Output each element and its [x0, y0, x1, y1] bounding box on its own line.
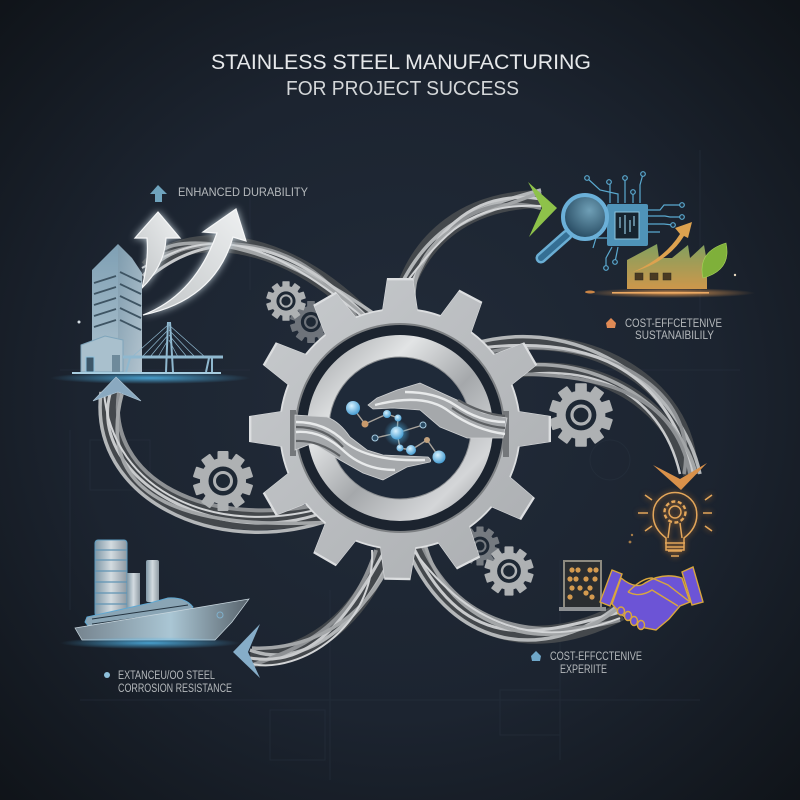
bullet: [104, 672, 110, 678]
label: corrosion: EXTANCEU/OO STEEL: [118, 670, 215, 682]
label: sustainability: SUSTANAIBILILY: [635, 330, 714, 342]
cable: right: [480, 337, 700, 474]
central gear: [249, 278, 551, 580]
small gears: [193, 281, 613, 596]
title: FOR PROJECT SUCCESS: [286, 78, 519, 100]
panel: sustainability: [528, 172, 755, 342]
icon: ship: [75, 598, 249, 640]
icon: abacus: [559, 561, 606, 611]
cable: top left: [142, 243, 380, 330]
panel: expertise: [531, 463, 712, 676]
panel: corrosion resistance: [60, 540, 260, 695]
gear inner ring: [296, 324, 504, 532]
icon: bridge: [123, 322, 223, 372]
hand sockets: [290, 410, 509, 457]
icon: leaf: [702, 243, 727, 278]
ground glow: [585, 288, 755, 298]
cable: bottom left: [250, 550, 396, 666]
icon: tower: [81, 244, 142, 372]
label: expertise: EXPERIITE: [560, 664, 607, 676]
icon: house: [531, 651, 541, 661]
icon: smokestacks: [95, 540, 159, 616]
arrow: white left: [135, 212, 180, 288]
label: sustainability: [625, 318, 722, 342]
lower hand: [295, 415, 431, 480]
cable: bottom right: [404, 540, 620, 640]
icon: handshake: [600, 567, 703, 630]
label: corrosion: [118, 670, 232, 695]
cable: top right: [388, 190, 541, 305]
label: expertise: [550, 651, 642, 676]
cable: left: [100, 392, 330, 532]
label: sustainability: COST-EFFCETENIVE: [625, 318, 722, 330]
title: STAINLESS STEEL MANUFACTURING: [211, 50, 591, 74]
icon: up arrow: [150, 185, 167, 202]
title: [211, 50, 591, 100]
icon: magnifier: [541, 195, 607, 258]
arrow: white right: [143, 209, 246, 315]
arrowhead: up: [93, 377, 141, 401]
label: expertise: COST-EFFCCTENIVE: [550, 651, 642, 663]
arrowhead: green: [528, 182, 557, 237]
icon: light bulb: [638, 493, 712, 556]
icon: factory: [627, 244, 707, 289]
arrowhead: orange: [653, 463, 707, 490]
upper hand: [368, 383, 507, 438]
water glow: [60, 637, 240, 649]
panel: durability: [50, 185, 308, 401]
icon: growth arrow: [633, 222, 692, 272]
icon: chip traces: [585, 172, 684, 270]
icon: chip: [607, 204, 648, 246]
arrowhead: blue: [233, 624, 260, 678]
base glow: [50, 372, 250, 384]
molecule: [346, 401, 446, 464]
label: durability: ENHANCED DURABILITY: [178, 185, 308, 199]
label: corrosion: CORROSION RESISTANCE: [118, 683, 232, 695]
icon: house: [606, 318, 616, 328]
